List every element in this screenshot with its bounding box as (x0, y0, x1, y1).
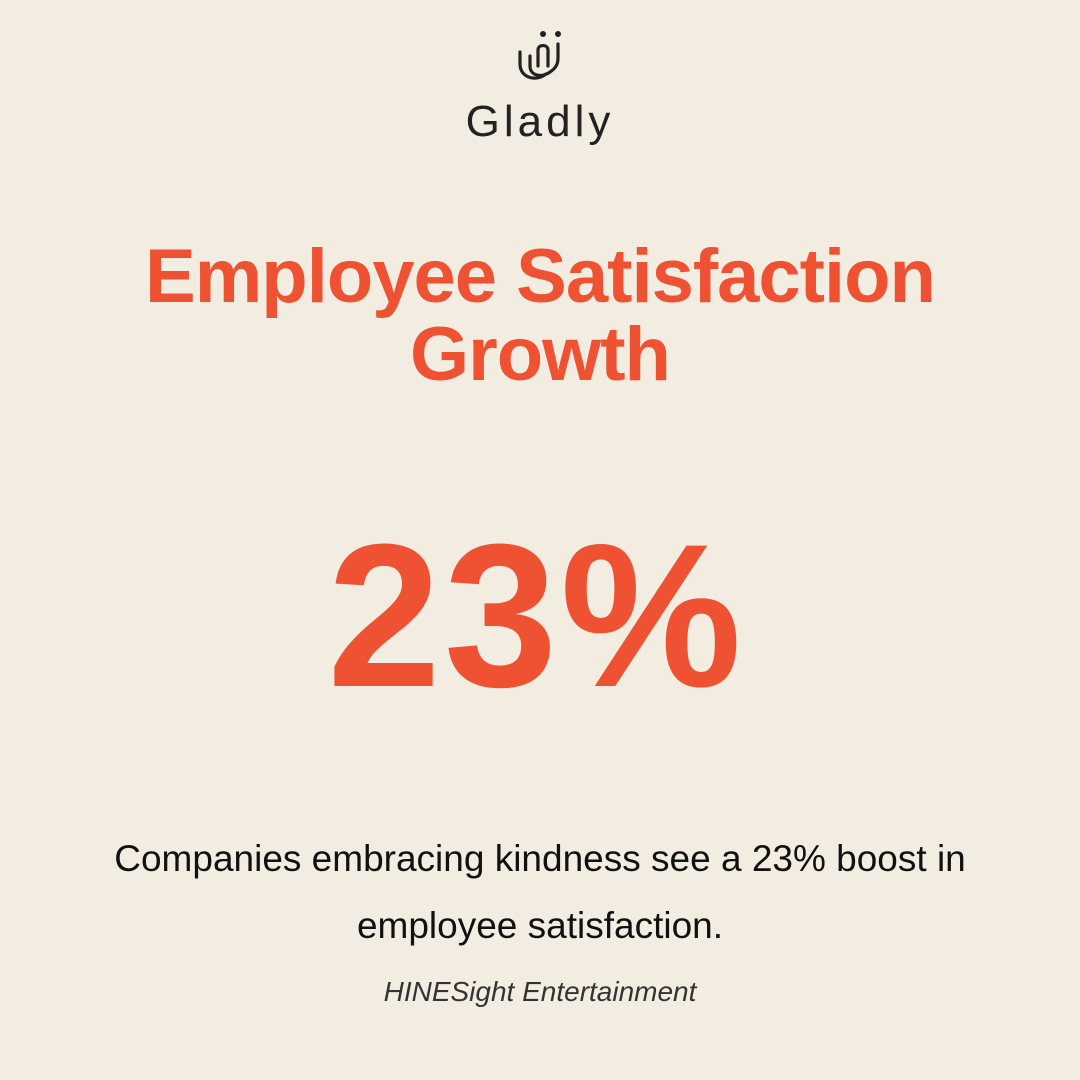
description: employee satisfaction. (357, 905, 723, 946)
title (145, 234, 935, 397)
icon: gladly mark (518, 31, 561, 80)
title: Employee Satisfaction (145, 234, 935, 319)
description (114, 838, 966, 946)
description: Companies embracing kindness see a 23% boost in (114, 838, 966, 879)
brand name: Gladly (466, 97, 614, 146)
big stat: 23% (327, 502, 745, 730)
title: Growth (410, 312, 670, 397)
logo (466, 31, 614, 146)
source: HINESight Entertainment (384, 976, 696, 1007)
